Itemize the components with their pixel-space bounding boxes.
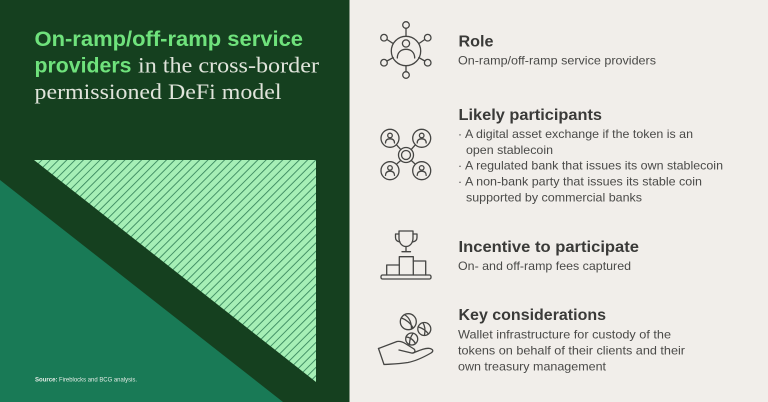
heading: role: Role — [458, 34, 494, 51]
title: in the cross-border — [138, 53, 320, 78]
heading: key considerations: Key considerations — [458, 307, 606, 324]
section: key considerations — [458, 307, 685, 374]
text: participants list: A regulated bank that issues its own stablecoin — [465, 158, 723, 172]
striped triangle — [34, 160, 316, 382]
text: participants list: · — [458, 158, 462, 172]
title: On-ramp/off-ramp service — [34, 27, 303, 51]
text: considerations body: Wallet infrastructure for custody of the — [458, 328, 671, 342]
title — [34, 27, 320, 104]
text: considerations body: tokens on behalf of their clients and their — [458, 344, 685, 358]
section: incentive — [458, 239, 639, 273]
icon: trophy on podium — [381, 231, 431, 279]
panel: right background — [349, 0, 768, 402]
icon: network person — [381, 22, 431, 78]
text: participants list: · — [458, 174, 462, 188]
title: providers — [34, 54, 132, 78]
text: participants list: open stablecoin — [466, 143, 553, 157]
text: incentive body: On- and off-ramp fees captured — [458, 259, 631, 273]
panel: left dark green — [0, 0, 350, 402]
text: considerations body: own treasury management — [458, 360, 607, 374]
text: participants list: A digital asset exchange if the token is an — [465, 127, 693, 141]
source note: Fireblocks and BCG analysis. — [59, 378, 137, 384]
text: considerations body — [458, 328, 685, 374]
heading: incentive to participate: Incentive to participate — [458, 239, 639, 256]
icon: connected participants — [381, 129, 431, 180]
text: participants list: A non-bank party that issues its stable coin — [465, 174, 702, 188]
text: participants list — [458, 127, 723, 204]
icon: hand with coins — [378, 314, 433, 364]
title: permissioned DeFi model — [34, 79, 282, 104]
text: participants list: · — [458, 127, 462, 141]
text: role body: On-ramp/off-ramp service providers — [458, 54, 656, 68]
heading: likely participants: Likely participants — [458, 107, 602, 124]
section: likely participants — [458, 107, 723, 204]
source note: Source: — [35, 378, 58, 384]
section: role — [458, 34, 656, 68]
teal triangle — [0, 180, 283, 402]
text: participants list: supported by commercial banks — [466, 190, 642, 204]
